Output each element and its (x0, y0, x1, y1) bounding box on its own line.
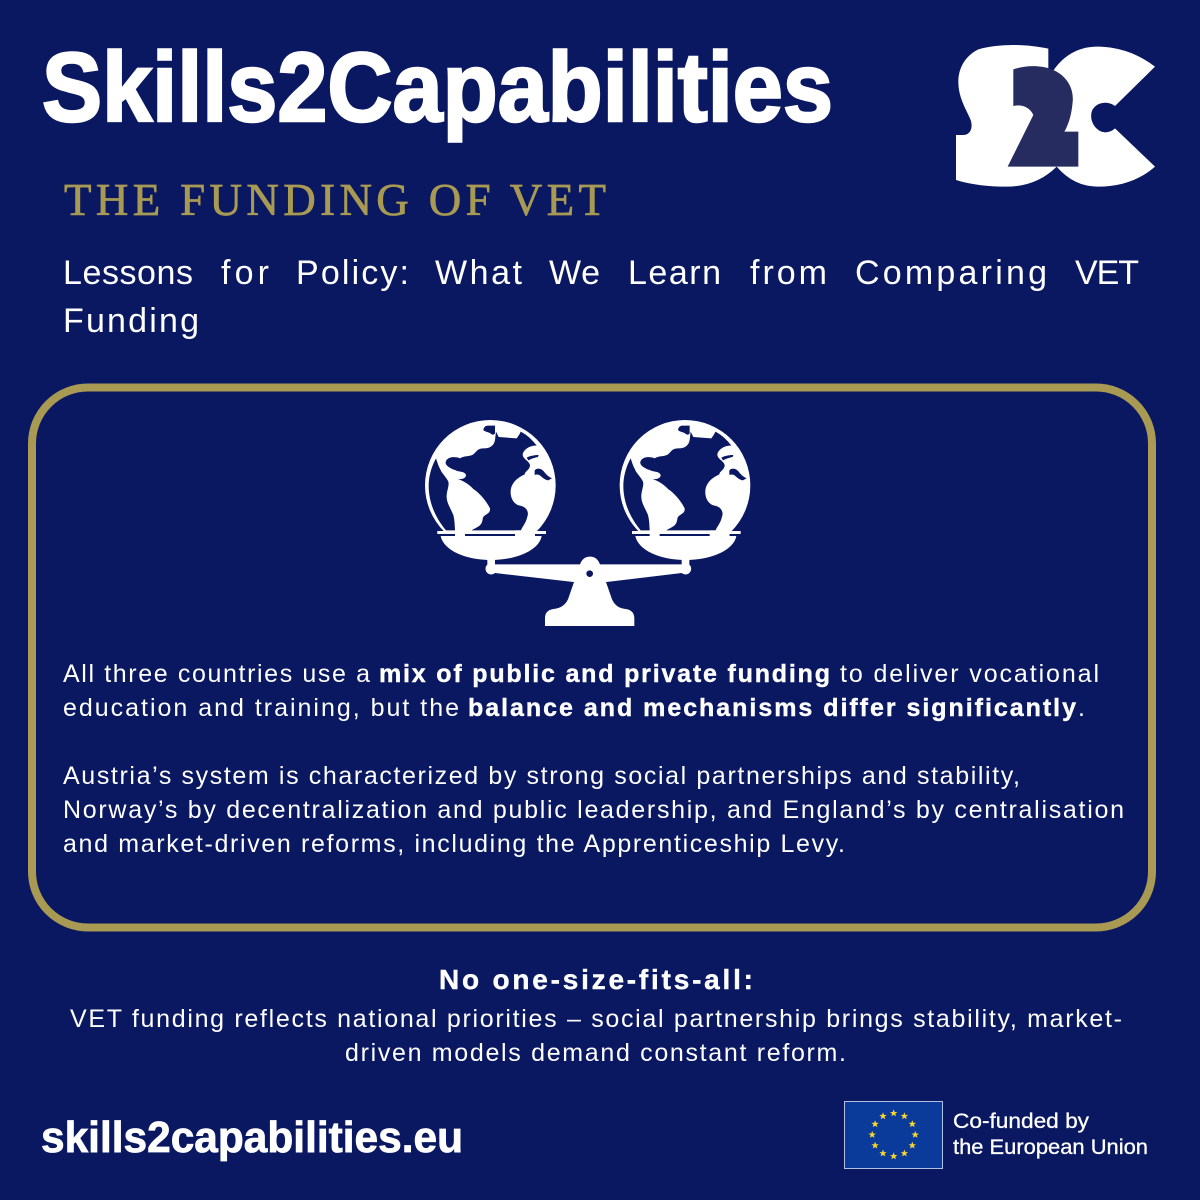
text block: country comparison: Norway’s by decentralization and public leadership, and England’s by centralisation (63, 796, 1124, 824)
text: co-funded by the European Union: the European Union (953, 1135, 1148, 1159)
subtitle: VET (1075, 254, 1139, 292)
subtitle: for (221, 254, 269, 292)
text block: funding mix: . (1078, 694, 1085, 722)
text block: country comparison (63, 762, 1124, 858)
callout heading: No one-size-fits-all: (439, 964, 753, 995)
subtitle: Policy: (296, 254, 409, 292)
callout text (70, 1005, 1122, 1067)
text block: funding mix: balance and mechanisms differ significantly (468, 694, 1076, 722)
logo: EU flag (844, 1102, 942, 1168)
text block: funding mix: mix of public and private funding (379, 660, 830, 688)
subtitle (63, 254, 1139, 340)
website url: skills2capabilities.eu (41, 1113, 463, 1162)
text: co-funded by the European Union: Co-funded by (953, 1109, 1089, 1133)
icon: globes on a balance scale (425, 420, 750, 626)
subtitle: Comparing (855, 254, 1047, 292)
text block: funding mix: to deliver vocational (840, 660, 1099, 688)
subtitle: We (549, 254, 600, 292)
heading: the funding of VET: THE FUNDING OF VET (64, 175, 606, 225)
text: co-funded by the European Union (953, 1109, 1148, 1159)
text block: funding mix (63, 660, 1099, 722)
subtitle: What (435, 254, 523, 292)
text block: funding mix: education and training, but the (63, 694, 459, 722)
text block: funding mix: All three countries use a (63, 660, 370, 688)
subtitle: Learn (628, 254, 721, 292)
title: Skills2Capabilities (42, 32, 833, 142)
callout text: VET funding reflects national priorities – social partnership brings stability, market- (70, 1005, 1122, 1033)
callout text: driven models demand constant reform. (345, 1039, 846, 1067)
icon: S2C logo (956, 45, 1155, 187)
subtitle: Funding (63, 302, 199, 340)
subtitle: from (750, 254, 827, 292)
panel: lessons box (32, 388, 1152, 928)
subtitle: Lessons (63, 254, 193, 292)
text block: country comparison: and market-driven reforms, including the Apprenticeship Levy. (63, 830, 845, 858)
text block: country comparison: Austria’s system is characterized by strong social partnerships and stability, (63, 762, 1020, 790)
